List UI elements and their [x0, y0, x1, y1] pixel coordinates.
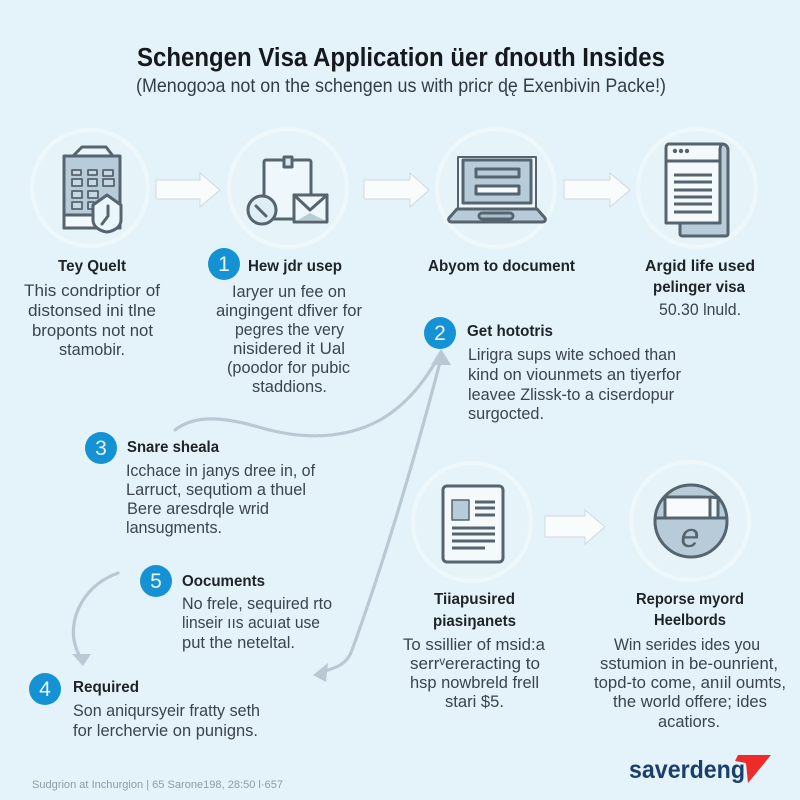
step 5: No frele, sequired rto: [182, 595, 332, 613]
step 3: [85, 432, 315, 537]
badge 5: 5: [150, 570, 162, 593]
badge 5: [140, 565, 172, 597]
panel: step four document: [638, 129, 756, 247]
text: column five: serrᵛereracting to: [410, 655, 540, 673]
curved arrow: step 2 down to step 4 area: [313, 358, 441, 682]
badge 2: 2: [434, 322, 446, 345]
text: column six: [594, 591, 786, 731]
step 5: [140, 565, 332, 652]
step 2: surgocted.: [468, 405, 544, 423]
text: column five: piasiŋanets: [433, 613, 516, 630]
text: column five: Tiiapusired: [434, 591, 515, 608]
text: column five: hsp nowbreld frell: [410, 674, 539, 692]
step 1: staddions.: [252, 378, 327, 396]
curved arrow: step 3 to step 2: [175, 349, 451, 436]
curved arrow: step 5 to step 4: [72, 573, 118, 666]
text: column four: pelinger visa: [653, 279, 745, 296]
step 1: [208, 248, 362, 396]
step 3: Icchace in janys dree in, of: [126, 462, 315, 480]
step 1: Hew jdr usep: [248, 258, 342, 275]
step 1: (poodor for pubic: [227, 359, 350, 377]
badge 4: [29, 673, 61, 705]
step 1: aingingent dfiver for: [216, 302, 362, 320]
text: column one: Tey Quelt: [58, 258, 127, 275]
text: column five: stari $5.: [445, 693, 504, 711]
icon: round emblem: e: [681, 517, 699, 555]
step 2: kind on viounmets an tiyerfor: [468, 366, 681, 384]
step 5: linseir ııs acuıat use: [182, 614, 320, 632]
text: column five: [403, 591, 546, 711]
step 4: [29, 673, 260, 740]
badge 2: [424, 317, 456, 349]
step 2: Lirigra sups wite schoed than: [468, 346, 676, 364]
heading: column three: Abyom to document: [428, 258, 576, 275]
footer contact line: Sudgrion at Inchurgion | 65 Sarone198, 28:50 l·657: [32, 779, 283, 791]
icon: laptop with form: [449, 157, 545, 222]
step 1: nisidered it Ual: [233, 340, 345, 358]
text: column one: [24, 258, 160, 359]
arrow: 3 to 4: [564, 173, 630, 207]
step 4: Required: [73, 679, 139, 696]
panel: tablet: [413, 463, 531, 581]
arrow: 2 to 3: [364, 173, 429, 207]
text: column one: stamobir.: [59, 341, 125, 359]
step 2: [424, 317, 681, 423]
panel: step one building: [32, 130, 148, 246]
text: column six: acatiors.: [658, 713, 720, 731]
text: column six: sstumion in be-ounrient,: [600, 655, 778, 673]
badge 1: [208, 248, 240, 280]
step 1: Iaryer un fee on: [232, 283, 346, 301]
step 2: Get hototris: [467, 323, 553, 340]
logo: saverdeng: [629, 756, 745, 784]
step 3: lansugments.: [126, 519, 222, 537]
step 5: Oocuments: [182, 573, 265, 590]
title: Schengen Visa Application üer ɗnouth Insides: [137, 44, 665, 72]
panel: step two clipboard: [229, 129, 347, 247]
step 3: Larruct, sequtiom a thuel: [126, 481, 306, 499]
panel: round badge e: [631, 462, 749, 580]
badge 3: 3: [95, 437, 107, 460]
badge 3: [85, 432, 117, 464]
text: column four: Argid life used: [645, 258, 755, 275]
badge 1: 1: [218, 253, 230, 276]
step 2: leavee Zlissk-to a ciserdopur: [468, 386, 674, 404]
icon: clipboard with clock and envelope: [248, 157, 327, 224]
text: column six: Reporse myord: [636, 591, 744, 608]
text: column one: This condriptior of: [24, 282, 160, 300]
text: column six: topd-to come, anıil oumts,: [594, 674, 786, 692]
arrow: 1 to 2: [156, 173, 220, 207]
panel: step three laptop: [437, 129, 555, 247]
subtitle: (Menogoɔa not on the schengen us with pricr ɖę Exenbivin Packe!): [136, 75, 666, 97]
icon: document window: [666, 144, 728, 236]
text: column six: Heelbords: [654, 612, 726, 629]
step 3: Bere aresdrqle wrid: [127, 500, 269, 518]
text: column six: Win serides ides you: [614, 636, 760, 654]
text: column five: To ssillier of msid:a: [403, 636, 546, 654]
text: column one: broponts not not: [32, 322, 153, 340]
text: column one: distonsed ini tlne: [28, 302, 156, 320]
step 4: for lerchervie on punigns.: [73, 722, 258, 740]
text: column four: [645, 258, 755, 319]
icon: tablet with article: [443, 486, 503, 562]
step 1: pegres the very: [235, 321, 345, 339]
step 3: Snare sheala: [127, 439, 219, 456]
icon: building with shield: [64, 147, 121, 232]
text: column four: 50.30 lnuld.: [659, 301, 741, 319]
arrow: 5 to 6: [545, 510, 605, 544]
text: column six: the world offere; ides: [613, 693, 767, 711]
step 4: Son aniqursyeir fratty seth: [73, 702, 260, 720]
badge 4: 4: [39, 678, 51, 701]
step 5: put the neteltal.: [182, 634, 295, 652]
